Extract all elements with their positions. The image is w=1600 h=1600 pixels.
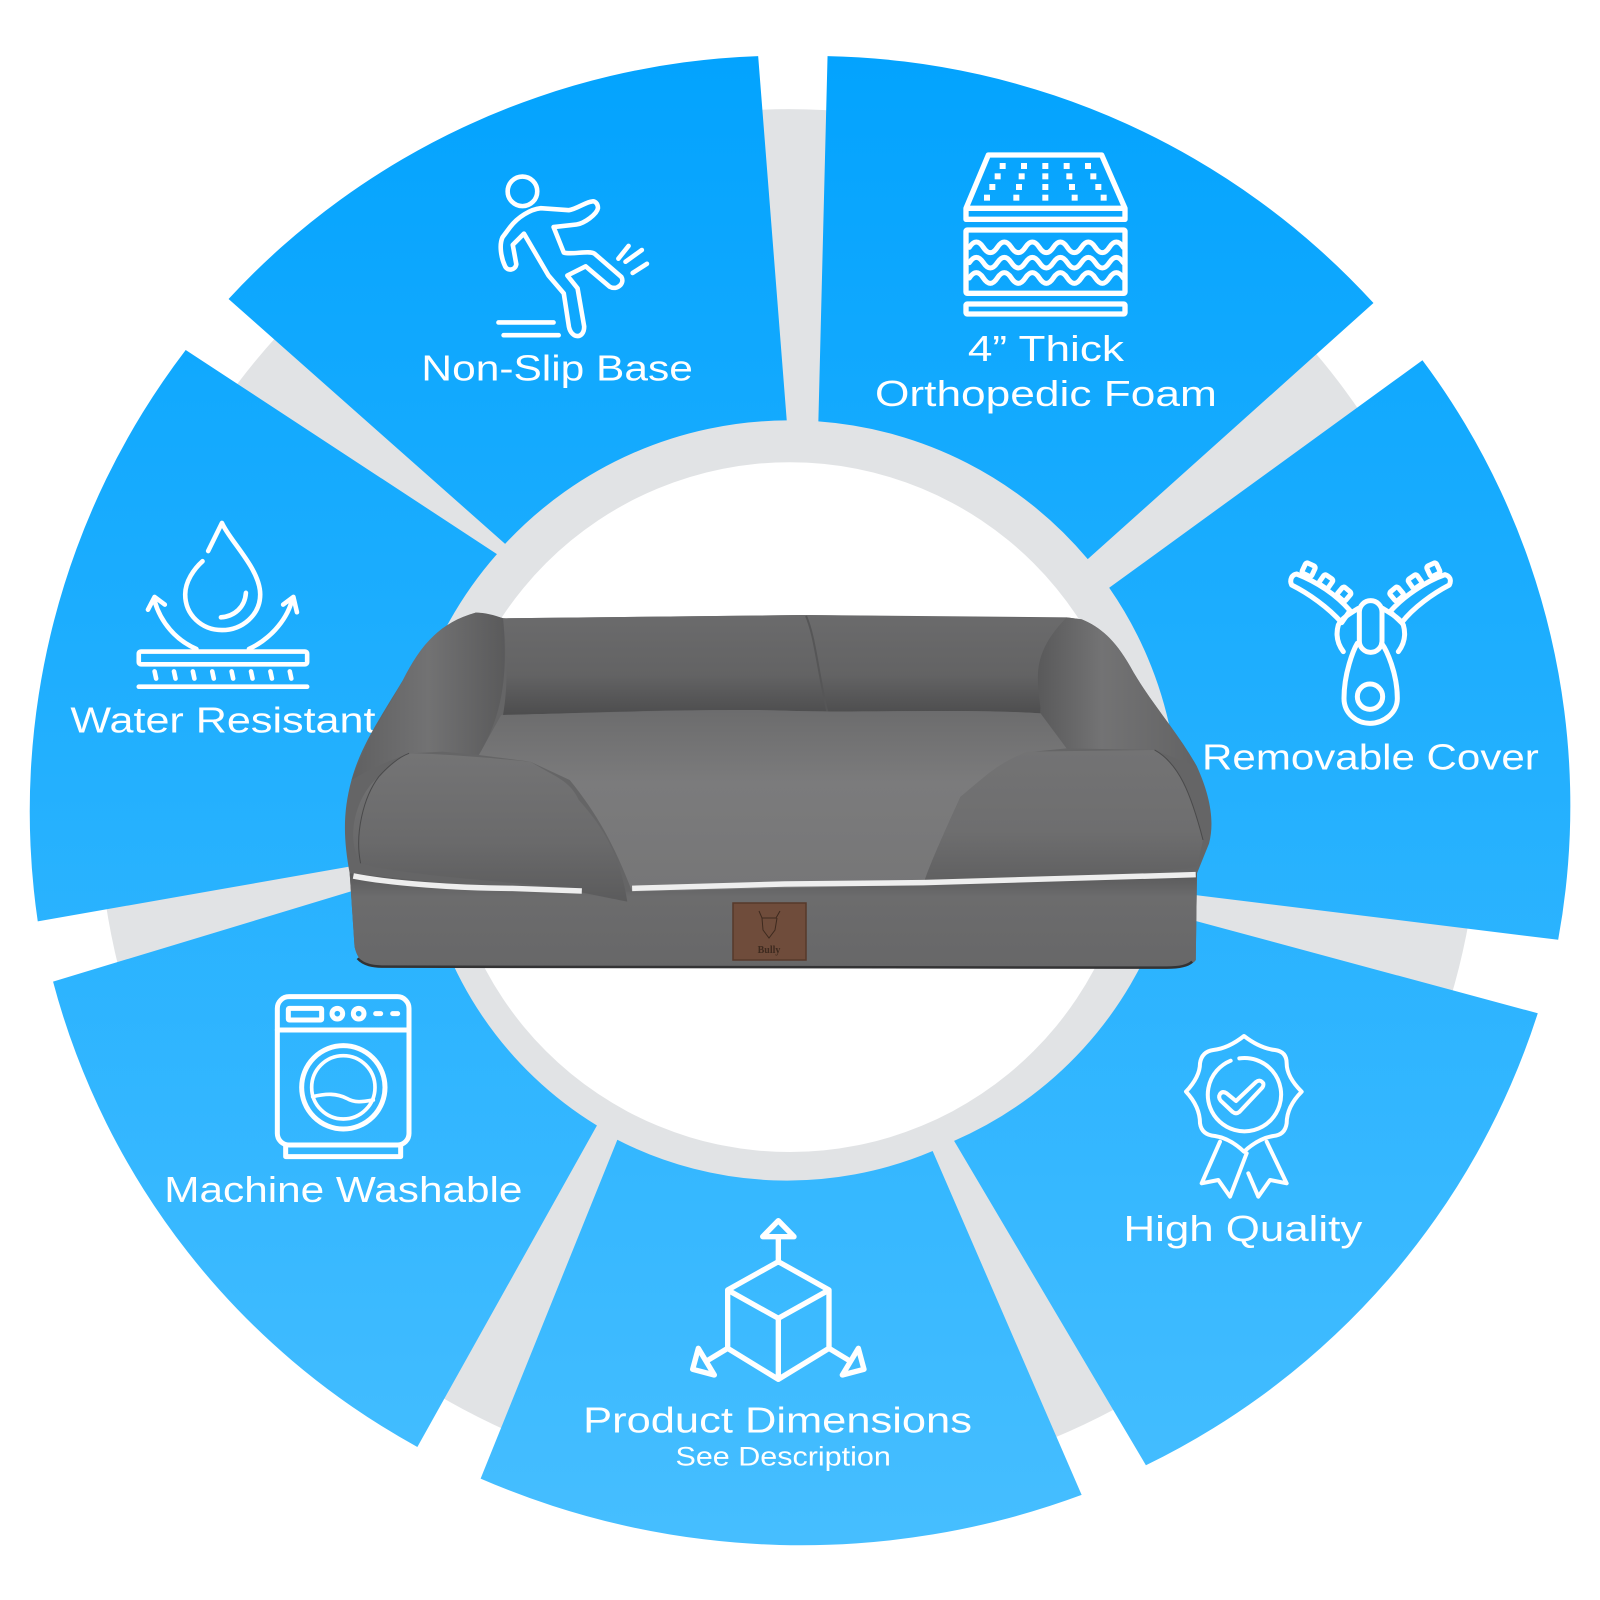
icon: quality rosette with check [1186,1036,1302,1197]
segment shape [53,869,597,1447]
panel: product dimensions [481,1140,1082,1545]
panel: water resistant [30,350,497,921]
label: Water Resistant [70,701,376,741]
icon: zipper [1291,562,1450,723]
left bolster seam [359,753,409,863]
label: High Quality [1123,1209,1362,1249]
white zipper piping [353,875,1196,891]
segment shape [481,1140,1082,1545]
panel: non-slip base [229,56,787,544]
panel: machine washable [53,869,597,1447]
segment shape [818,56,1373,559]
panel: orthopedic foam [818,56,1373,559]
label: Machine Washable [164,1170,522,1210]
icon: foam mattress layers [966,155,1125,314]
right bolster seam [1155,750,1203,840]
dark base edge [358,958,1192,968]
icon: person slipping [498,177,647,336]
segment shape [30,350,497,921]
segment shape [954,912,1538,1465]
leather brand tag: Bully [758,945,780,956]
icon: cube with dimension arrows [693,1221,864,1379]
segment shape [229,56,787,544]
icon: washing machine [277,997,409,1157]
front base [350,873,1197,968]
label: Removable Cover [1202,737,1539,777]
product: gray dog bed [345,613,1211,968]
label: Orthopedic Foam [875,374,1217,414]
gray ring behind segments [98,109,1480,1491]
right arm bolster [1038,617,1197,767]
sublabel: See Description [676,1441,891,1471]
back bolster [503,615,1067,715]
label: Product Dimensions [583,1401,972,1441]
bed silhouette [345,613,1211,968]
right front bolster [923,750,1203,885]
panel: removable cover [1109,360,1570,940]
left arm bolster [352,613,505,780]
left front bolster [353,753,627,902]
segment shape [1109,360,1570,940]
bed body [345,613,1211,968]
back bolster crease [806,616,827,712]
leather brand tag [733,903,806,960]
panel: high quality [954,912,1538,1465]
seat floor [479,710,1067,892]
label: 4” Thick [968,329,1124,369]
icon: water drop repelled by fabric [139,523,307,687]
label: Non-Slip Base [421,349,693,389]
